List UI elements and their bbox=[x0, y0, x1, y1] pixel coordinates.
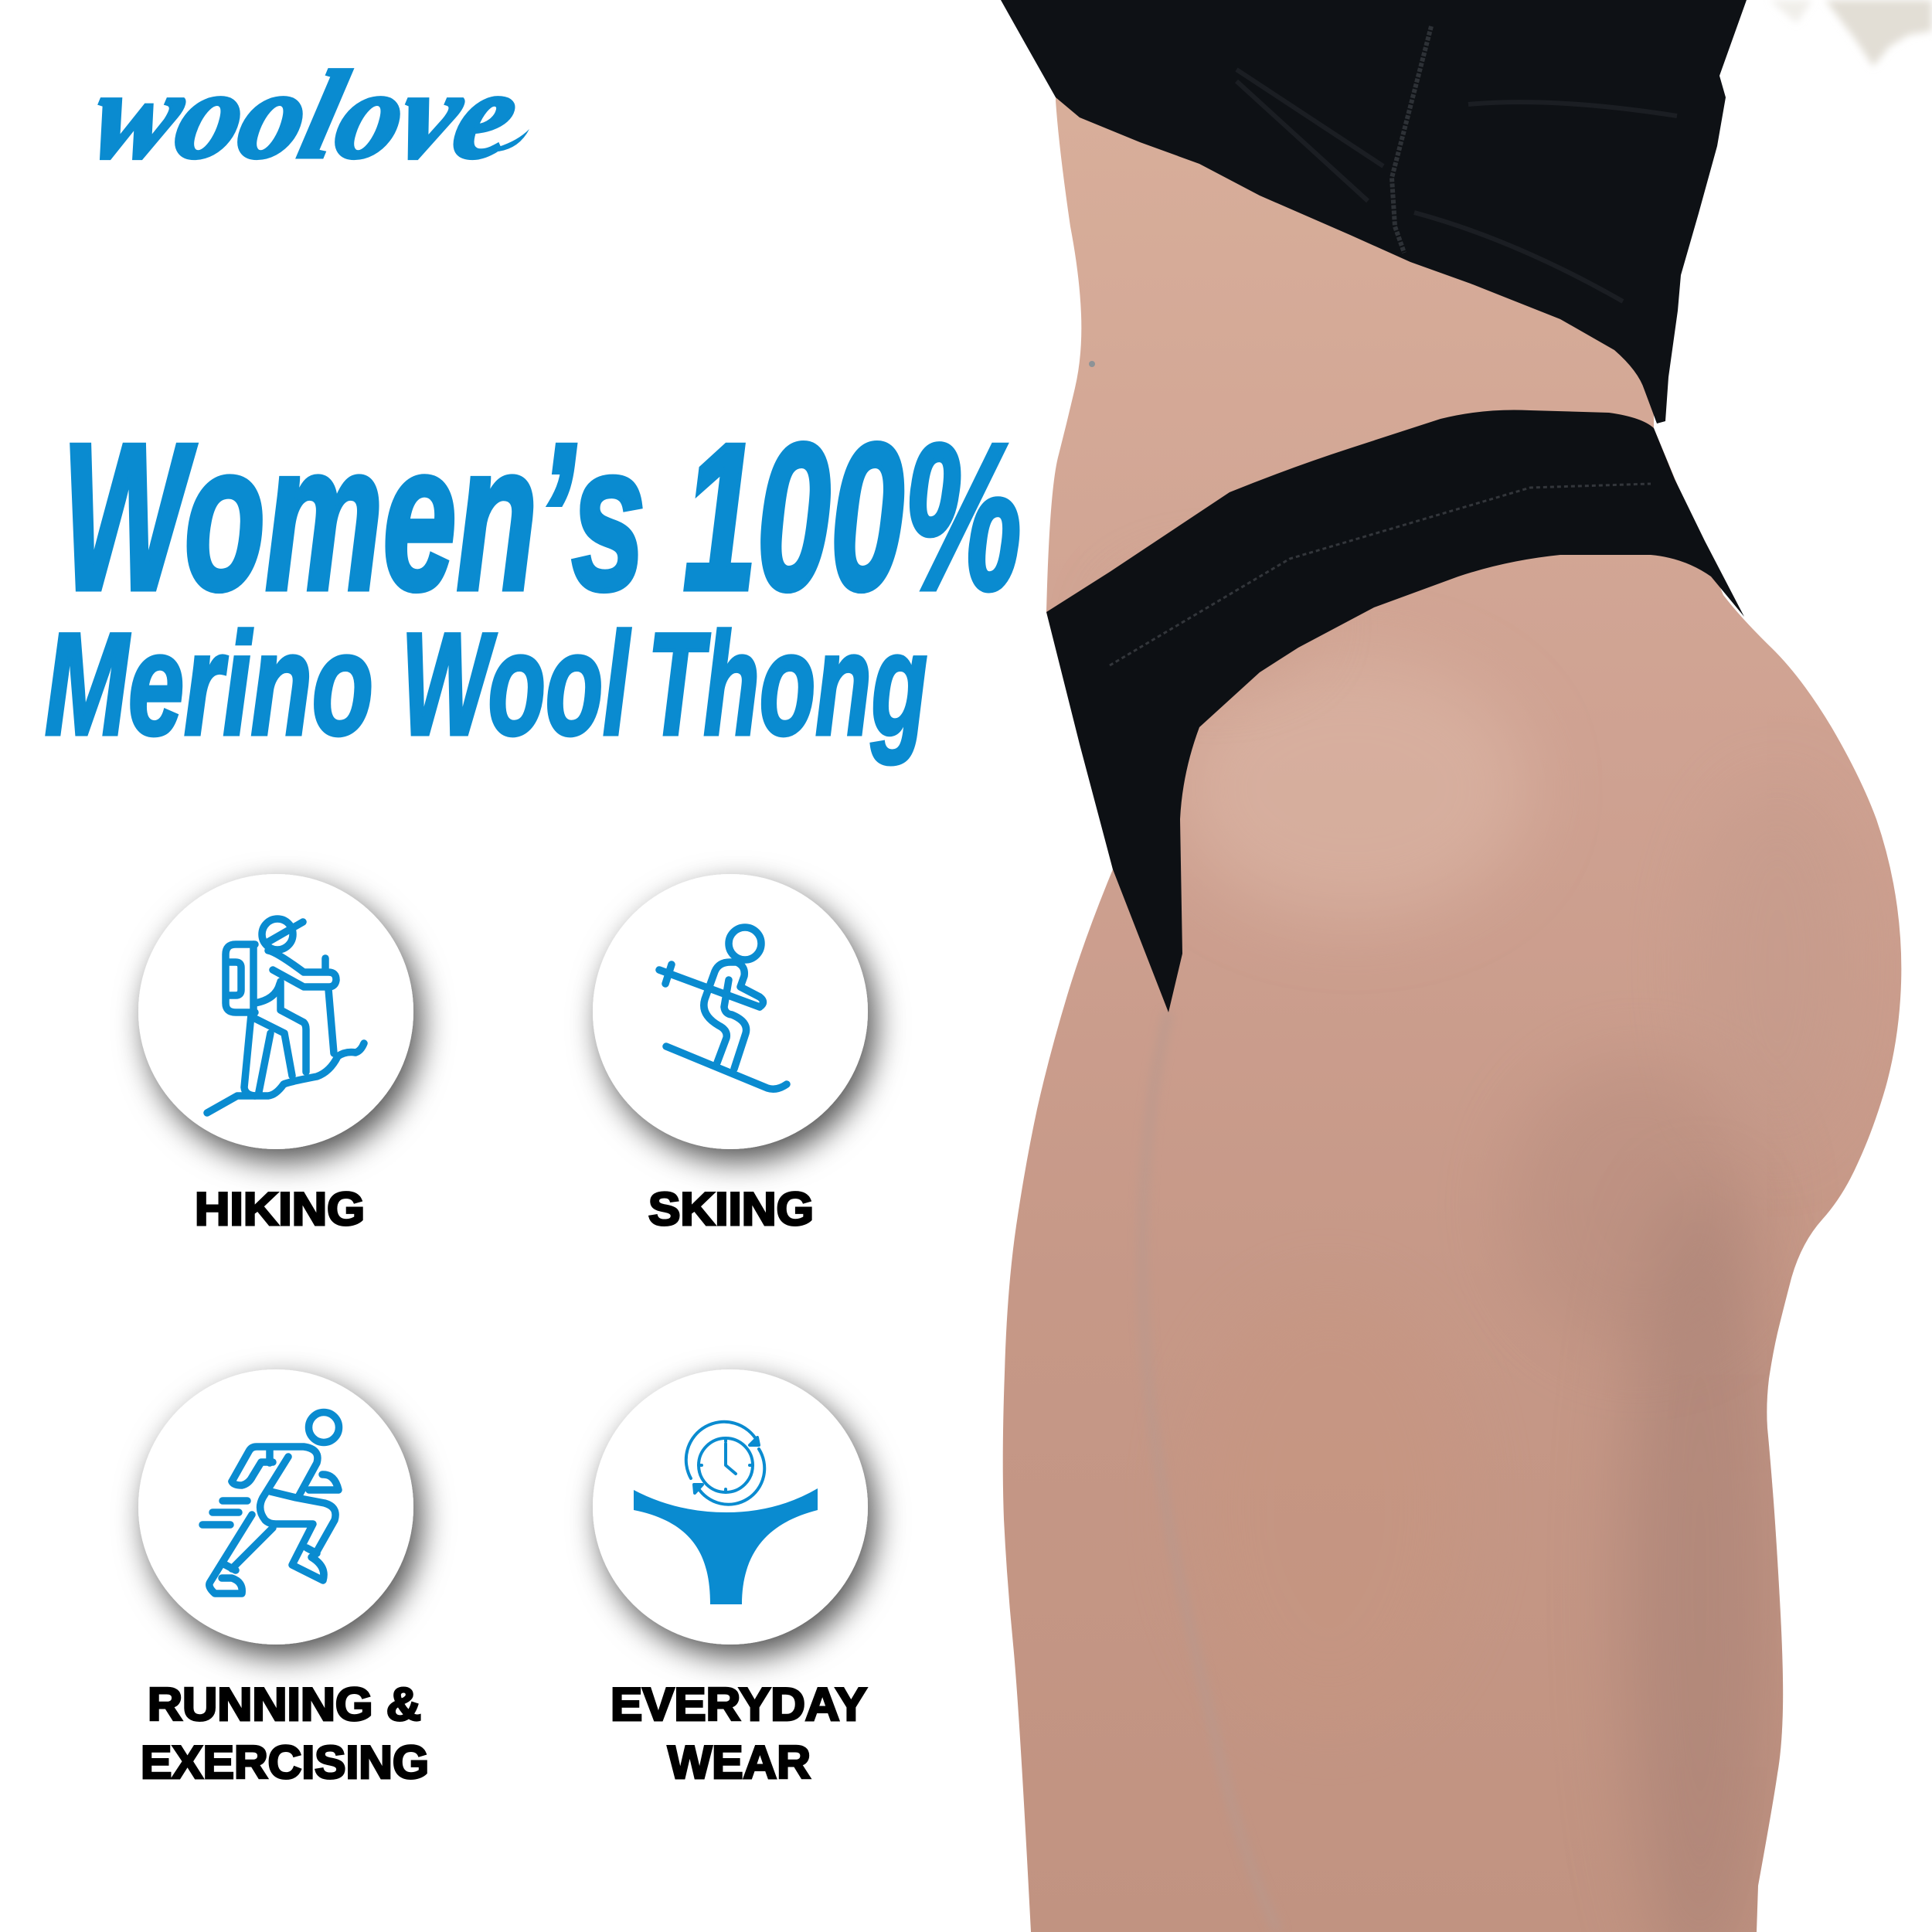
label: everyday wear bbox=[611, 1679, 867, 1788]
title line 2: Merino bbox=[45, 603, 373, 765]
icon: skier bbox=[659, 927, 787, 1089]
label: everyday wear: EVERYDAY bbox=[611, 1679, 867, 1730]
circle: skiing bbox=[593, 874, 868, 1149]
top seam and folds bbox=[1236, 26, 1677, 301]
panel: everyday wear bbox=[593, 1369, 868, 1788]
black thong bbox=[1046, 410, 1744, 1012]
icon: clock and thong bbox=[634, 1422, 818, 1604]
icon: runner bbox=[202, 1413, 338, 1594]
icon: clock bbox=[686, 1422, 764, 1505]
label: running and exercising: EXERCISING bbox=[141, 1736, 429, 1788]
title line 1: 100% bbox=[683, 401, 1022, 634]
label: hiking: HIKING bbox=[195, 1183, 365, 1235]
product photo: model body bbox=[1001, 0, 1932, 1932]
icon: thong shape bbox=[634, 1488, 818, 1604]
panel: skiing bbox=[593, 874, 868, 1235]
circle: everyday bbox=[593, 1369, 868, 1645]
body silhouette bbox=[1003, 77, 1901, 1932]
title line 2: Thong bbox=[648, 603, 927, 765]
label: everyday wear: WEAR bbox=[668, 1736, 811, 1788]
panel: running and exercising bbox=[138, 1369, 429, 1788]
logo: woolove: woolove bbox=[80, 45, 532, 184]
label: running and exercising: RUNNING & bbox=[148, 1679, 421, 1730]
icon: hiker bbox=[207, 919, 364, 1113]
body shading bbox=[1113, 572, 1862, 1932]
label: running and exercising bbox=[141, 1679, 429, 1788]
black top bbox=[1001, 0, 1747, 423]
circle: hiking bbox=[138, 874, 413, 1149]
label: skiing: SKIING bbox=[648, 1183, 814, 1235]
circle: running bbox=[138, 1369, 413, 1645]
hair bbox=[1770, 0, 1932, 66]
panel: hiking bbox=[138, 874, 413, 1235]
title line 1: Women’s bbox=[62, 401, 645, 634]
title line 2 bbox=[45, 603, 927, 765]
navel piercing bbox=[1089, 361, 1095, 367]
thong stitching bbox=[1110, 484, 1651, 665]
title line 2: Wool bbox=[401, 603, 631, 765]
